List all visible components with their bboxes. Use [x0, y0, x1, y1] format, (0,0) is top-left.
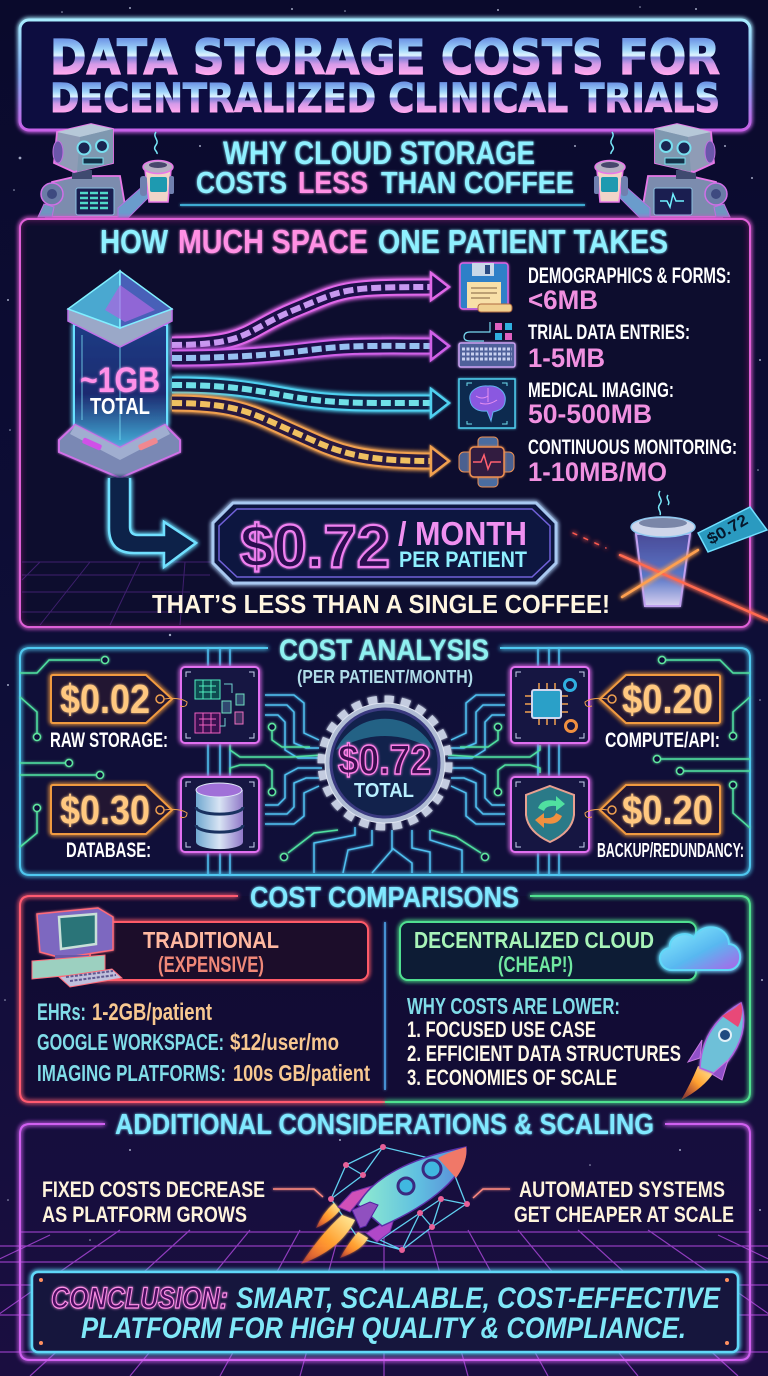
icon: cloud	[660, 927, 740, 970]
conclusion box: PLATFORM FOR HIGH QUALITY & COMPLIANCE.	[81, 1312, 686, 1345]
price tag: database: DATABASE:	[66, 839, 151, 862]
section heading: cost analysis: COST ANALYSIS	[279, 634, 489, 667]
callout: price per month: / MONTH	[398, 515, 527, 552]
item: continuous monitoring	[528, 436, 737, 487]
total gear badge	[323, 701, 447, 825]
item: continuous monitoring: 1-10MB/MO	[528, 457, 667, 487]
note: fixed costs: FIXED COSTS DECREASE	[42, 1177, 265, 1202]
header: decentralized cloud: (CHEAP!)	[498, 952, 573, 977]
item: medical imaging	[528, 379, 674, 429]
icon: old computer	[32, 908, 122, 987]
list: why costs are lower	[407, 993, 681, 1090]
tower label	[80, 361, 160, 419]
icon: watch	[459, 437, 514, 487]
icon: small rocket	[681, 1003, 744, 1100]
chip: database	[181, 777, 259, 852]
title text: DATA STORAGE COSTS FOR	[50, 30, 720, 86]
list: traditional costs	[37, 999, 370, 1086]
header: traditional: (EXPENSIVE)	[158, 952, 264, 977]
circuit traces	[20, 648, 750, 875]
title text	[50, 30, 720, 122]
price tag: raw storage: $0.02	[60, 676, 150, 722]
note: automated systems: AUTOMATED SYSTEMS	[519, 1177, 725, 1202]
rocket fins	[338, 1186, 372, 1212]
section heading: cost analysis	[279, 634, 489, 687]
connector: right	[473, 1189, 510, 1198]
tower label: ~1GB	[80, 361, 160, 400]
subtitle: LESS	[298, 165, 368, 200]
price tag: backup	[585, 785, 744, 862]
tower label: TOTAL	[90, 393, 150, 419]
chip: compute	[511, 667, 589, 743]
icon: floppy disk	[460, 263, 512, 312]
price tag: database	[51, 785, 187, 862]
item: demographics & forms: <6MB	[528, 285, 598, 315]
robot right with coffee	[594, 124, 730, 218]
rocket flames	[301, 1203, 368, 1264]
panel: cost comparisons	[20, 882, 750, 1102]
list: traditional costs: IMAGING PLATFORMS:	[37, 1060, 226, 1086]
list: why costs are lower: 1. FOCUSED USE CASE	[407, 1017, 596, 1042]
title panel	[20, 20, 750, 130]
chip: backup	[511, 777, 589, 852]
robot left with coffee	[38, 124, 174, 218]
note: fixed costs	[42, 1177, 265, 1227]
panel grid floor	[22, 562, 220, 625]
price tag: raw storage	[50, 675, 187, 752]
subtitle: WHY CLOUD STORAGE	[223, 135, 535, 171]
price tag: compute: COMPUTE/API:	[605, 729, 720, 752]
section heading: scaling: ADDITIONAL CONSIDERATIONS & SCALING	[115, 1109, 654, 1141]
callout: price per month: PER PATIENT	[399, 547, 527, 572]
list: traditional costs: $12/user/mo	[230, 1029, 339, 1055]
price tag: $0.72	[704, 512, 751, 548]
price tag: backup: $0.20	[622, 787, 713, 833]
panel heading: HOW	[100, 223, 169, 260]
header: traditional	[90, 922, 368, 980]
panel heading: MUCH SPACE	[178, 223, 368, 260]
item: trial data entries	[528, 321, 690, 373]
total gear badge: TOTAL	[354, 780, 414, 802]
list: traditional costs: 1-2GB/patient	[92, 999, 212, 1026]
price tag	[698, 507, 767, 552]
note: fixed costs: AS PLATFORM GROWS	[42, 1202, 247, 1227]
icon: crossed out coffee	[573, 491, 768, 620]
panel: how much space	[20, 219, 768, 627]
subtitle: COSTS	[196, 165, 287, 200]
panel: additional considerations	[20, 1109, 750, 1360]
stream arrow: trial data	[172, 332, 449, 360]
callout text: less than a coffee: THAT’S LESS THAN A SINGLE COFFEE!	[152, 589, 610, 619]
list: why costs are lower: WHY COSTS ARE LOWER:	[407, 993, 620, 1019]
conclusion box	[32, 1272, 738, 1352]
network mesh	[331, 1147, 466, 1250]
list: why costs are lower: 3. ECONOMIES OF SCALE	[407, 1065, 617, 1090]
header: decentralized cloud: DECENTRALIZED CLOUD	[414, 927, 654, 953]
header: traditional: TRADITIONAL	[143, 927, 279, 953]
section heading: cost comparisons: COST COMPARISONS	[250, 882, 519, 914]
list: why costs are lower: 2. EFFICIENT DATA STRUCTURES	[407, 1041, 681, 1066]
item: demographics & forms	[528, 263, 731, 315]
item: medical imaging: 50-500MB	[528, 399, 652, 429]
total gear badge: $0.72	[338, 736, 431, 783]
list: traditional costs: 100s GB/patient	[233, 1060, 370, 1086]
price tag: compute: $0.20	[622, 676, 713, 722]
price tag: raw storage: RAW STORAGE:	[50, 729, 168, 752]
arrow: to monthly price	[109, 478, 196, 567]
icon: brain scan	[459, 379, 515, 428]
stream arrow: demographics	[172, 273, 449, 345]
callout: price per month	[213, 503, 556, 583]
laser strike	[573, 533, 768, 620]
rocket body	[358, 1147, 466, 1226]
stream arrow: medical imaging	[172, 385, 449, 417]
subtitle	[180, 135, 585, 205]
callout: price per month: $0.72	[240, 513, 390, 580]
panel heading	[100, 223, 668, 260]
price tag: compute	[585, 675, 720, 752]
stream arrow: monitoring	[172, 403, 449, 475]
icon: network and rocket	[301, 1144, 470, 1264]
connector: left	[273, 1189, 323, 1197]
subtitle: THAN COFFEE	[381, 165, 574, 200]
list: traditional costs: EHRs:	[37, 999, 86, 1026]
note: automated systems	[514, 1177, 734, 1227]
item: trial data entries: 1-5MB	[528, 343, 605, 373]
list: traditional costs: GOOGLE WORKSPACE:	[37, 1029, 224, 1055]
panel: cost analysis	[20, 634, 750, 875]
conclusion box: CONCLUSION:	[51, 1282, 228, 1315]
item: medical imaging: MEDICAL IMAGING:	[528, 379, 674, 402]
item: trial data entries: TRIAL DATA ENTRIES:	[528, 321, 690, 344]
section heading: cost analysis: (PER PATIENT/MONTH)	[297, 667, 473, 687]
icon: data tower	[59, 271, 180, 478]
price tag: database: $0.30	[60, 787, 150, 833]
icon: keyboard	[459, 322, 515, 367]
panel heading: ONE PATIENT TAKES	[378, 223, 668, 260]
chip: raw storage	[181, 667, 259, 743]
header: decentralized cloud	[400, 922, 696, 980]
